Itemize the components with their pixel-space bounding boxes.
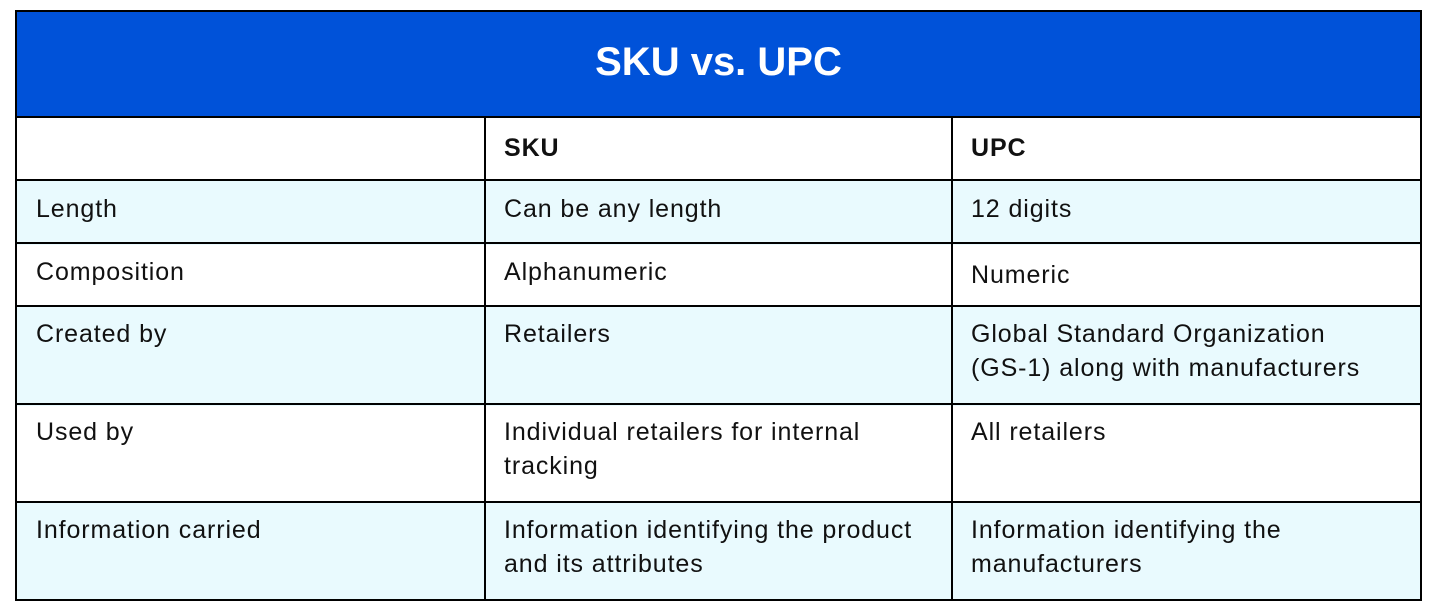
text: (GS-1) along with manufacturers	[971, 354, 1360, 382]
text: Information identifying the	[971, 516, 1282, 544]
text: Alphanumeric	[504, 258, 668, 286]
text: All retailers	[971, 418, 1106, 446]
row: composition: Composition	[36, 258, 185, 286]
text: UPC	[971, 134, 1026, 162]
text: Global Standard Organization	[971, 320, 1326, 348]
row: information carried: Information carried	[36, 516, 262, 544]
title banner: SKU vs. UPC	[595, 40, 842, 84]
text: manufacturers	[971, 550, 1142, 578]
text: Numeric	[971, 261, 1070, 289]
header row: SKU	[504, 134, 559, 162]
text: Information identifying the product	[504, 516, 912, 544]
text: Individual retailers for internal	[504, 418, 860, 446]
row backgrounds	[15, 116, 1422, 182]
text: 12 digits	[971, 195, 1072, 223]
row: length: Length	[36, 195, 118, 223]
text: tracking	[504, 452, 599, 480]
row: created by: Created by	[36, 320, 167, 348]
row: used by: Used by	[36, 418, 134, 446]
title banner	[17, 12, 1420, 116]
text: Retailers	[504, 320, 611, 348]
text: Can be any length	[504, 195, 722, 223]
text: and its attributes	[504, 550, 704, 578]
